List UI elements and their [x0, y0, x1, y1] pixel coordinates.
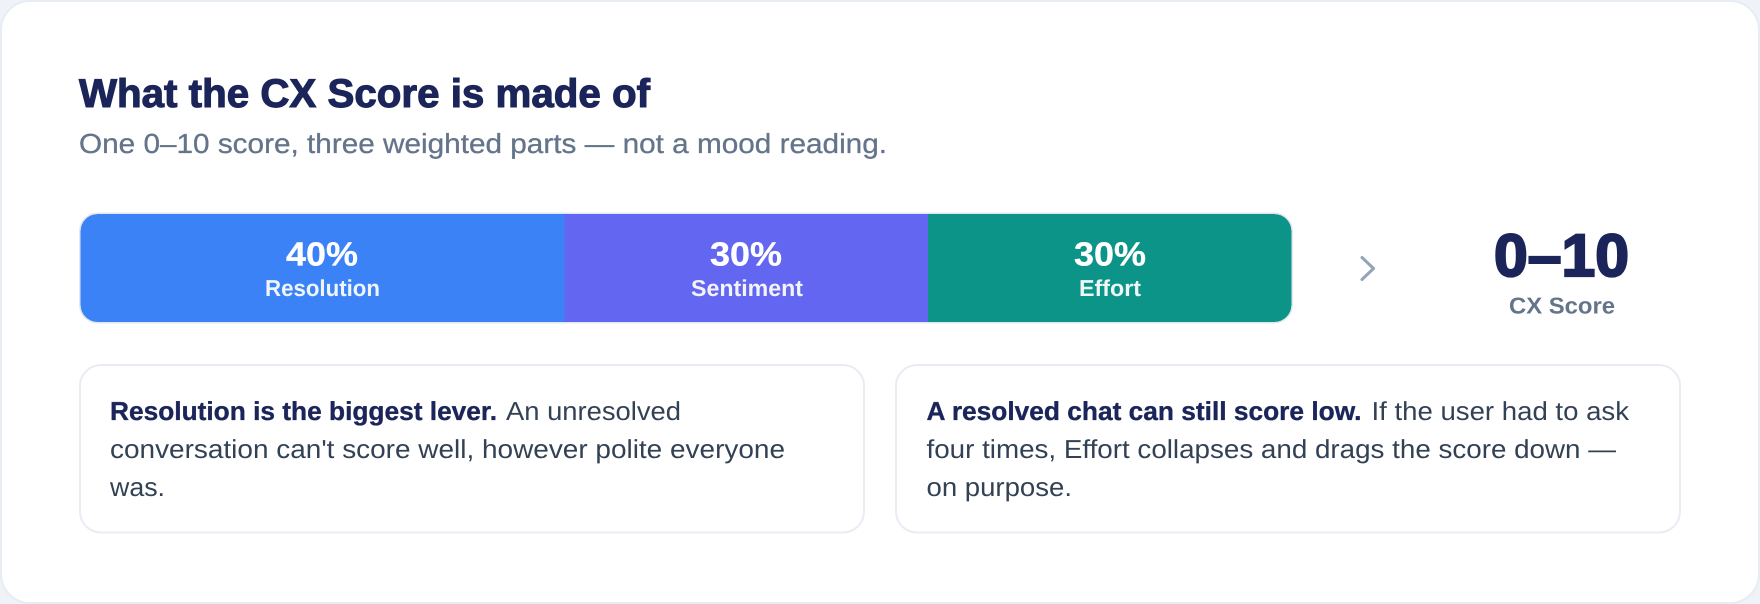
callout: a resolved chat can still score low — [896, 365, 1680, 532]
callout: a resolved chat can still score low: four times, Effort collapses and drags the score down — — [926, 434, 1616, 464]
segment: resolution 40%: Resolution — [265, 275, 380, 301]
segment: effort 30%: Effort — [1079, 275, 1141, 301]
subtitle: One 0–10 score, three weighted parts — not a mood reading. — [79, 128, 887, 159]
title: What the CX Score is made of — [79, 72, 651, 116]
segment: sentiment 30% — [691, 236, 803, 301]
result: CX score scale: CX Score — [1509, 292, 1615, 318]
segment: resolution 40%: 40% — [286, 236, 358, 274]
callout: a resolved chat can still score low: A resolved chat can still score low. — [926, 396, 1362, 426]
segment: sentiment 30%: Sentiment — [691, 275, 803, 301]
callout: a resolved chat can still score low: on purpose. — [926, 472, 1072, 502]
callout: resolution is the biggest lever: Resolution is the biggest lever. — [110, 396, 497, 426]
callout: resolution is the biggest lever — [80, 365, 864, 532]
callout: resolution is the biggest lever: conversation can't score well, however polite everyone — [110, 434, 785, 464]
result: CX score scale — [1494, 222, 1629, 318]
icon: chevron arrow — [1362, 258, 1374, 280]
segment: sentiment 30%: 30% — [710, 236, 782, 274]
callout: a resolved chat can still score low: If the user had to ask — [1372, 396, 1630, 426]
segment: effort 30%: 30% — [1074, 236, 1146, 274]
segment: resolution 40% — [265, 236, 380, 301]
callout: resolution is the biggest lever: was. — [109, 472, 165, 502]
stacked weight bar — [79, 213, 1293, 323]
result: CX score scale: 0–10 — [1494, 222, 1629, 289]
callout: resolution is the biggest lever: An unresolved — [506, 396, 681, 426]
segment: effort 30% — [1074, 236, 1146, 301]
